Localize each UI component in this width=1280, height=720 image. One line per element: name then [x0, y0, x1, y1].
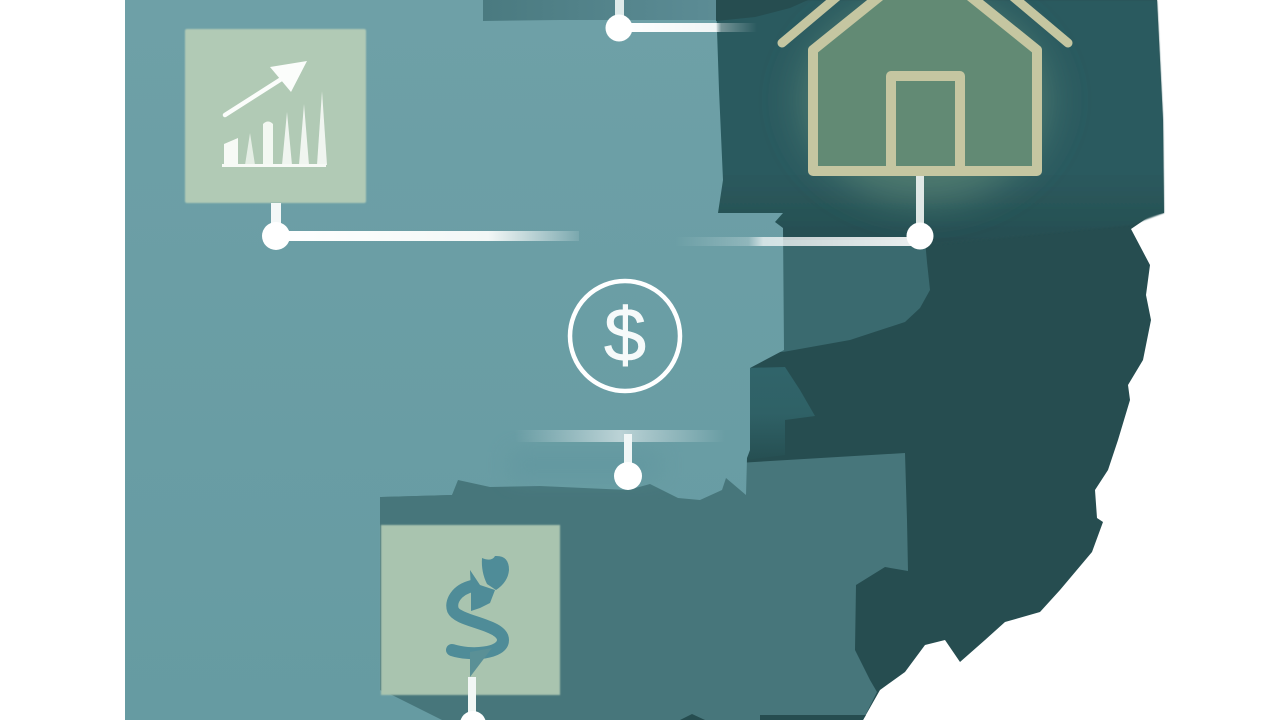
map region: light western area: [125, 0, 784, 720]
map region: upper dark area: [716, 0, 1164, 245]
map region: teal central-east block: [775, 240, 930, 352]
icon: dollar coin: $: [604, 293, 646, 378]
connector: coin to lower node: [515, 430, 725, 490]
icon: twisted dollar with heart: [452, 556, 509, 677]
card: growth chart: [185, 29, 366, 203]
map region: top northern strip: [483, 0, 716, 21]
icon: rising arrow: [225, 61, 307, 115]
connector: chart card to centre: [262, 203, 579, 250]
connector: top node: [606, 0, 757, 42]
map region: top dark notch: [716, 0, 808, 21]
map region: teal wedge: [745, 367, 815, 460]
card: dollar and heart: [381, 525, 560, 695]
icon: house: [770, 0, 1080, 230]
icon: bar chart: [222, 91, 327, 167]
map region: bottom dark edge: [680, 714, 866, 720]
connector: dollar card to bottom node: [460, 677, 486, 720]
soft shading of central block: [510, 452, 660, 478]
icon: dollar coin: [570, 281, 680, 391]
map region: southern teal block: [380, 453, 908, 720]
connector: house to centre: [675, 176, 934, 250]
